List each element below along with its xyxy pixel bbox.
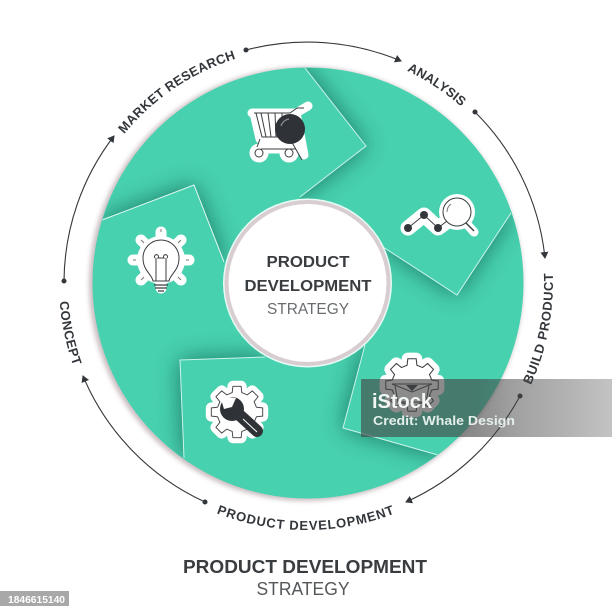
arrow: product development to concept [83, 376, 207, 504]
arrow: concept to market research [62, 136, 114, 283]
center hub circle [223, 198, 392, 368]
bottom subtitle: STRATEGY [256, 578, 350, 599]
image id tag: 1846615140 [8, 594, 65, 606]
panel: concept segment [102, 175, 232, 262]
bottom title [183, 557, 427, 599]
icon: light bulb [133, 229, 189, 291]
icon: chart line and magnifier [404, 194, 475, 232]
icon: gear with box [386, 359, 438, 411]
label: concept: CONCEPT [60, 302, 82, 364]
label: product development: PRODUCT DEVELOPMENT [217, 505, 392, 530]
label: market research: MARKET RESEARCH [118, 50, 235, 134]
label: analysis: ANALYSIS [407, 64, 466, 106]
panel: analysis segment [384, 212, 516, 304]
watermark credit: Credit: Whale Design [373, 413, 515, 428]
icon: shopping cart with ball [250, 106, 308, 162]
main teal pinwheel disk [89, 60, 524, 501]
panel: product development segment [180, 357, 270, 458]
arrow: market research to analysis [244, 42, 401, 61]
panel: market research segment [300, 68, 374, 200]
label: build product: BUILD PRODUCT [523, 274, 554, 384]
bottom title: PRODUCT DEVELOPMENT [183, 557, 427, 577]
hub subtitle: STRATEGY [267, 301, 349, 318]
watermark band: iStock [372, 391, 433, 413]
arrow: analysis to build product [473, 110, 545, 258]
panel: build product segment [343, 345, 470, 455]
icon: gear with wrench [211, 386, 263, 438]
hub title second line: DEVELOPMENT [244, 278, 372, 295]
arrow: build product to product development [406, 394, 522, 502]
image id tag [0, 591, 69, 606]
watermark band [361, 379, 612, 437]
hub title: PRODUCT [266, 254, 350, 271]
